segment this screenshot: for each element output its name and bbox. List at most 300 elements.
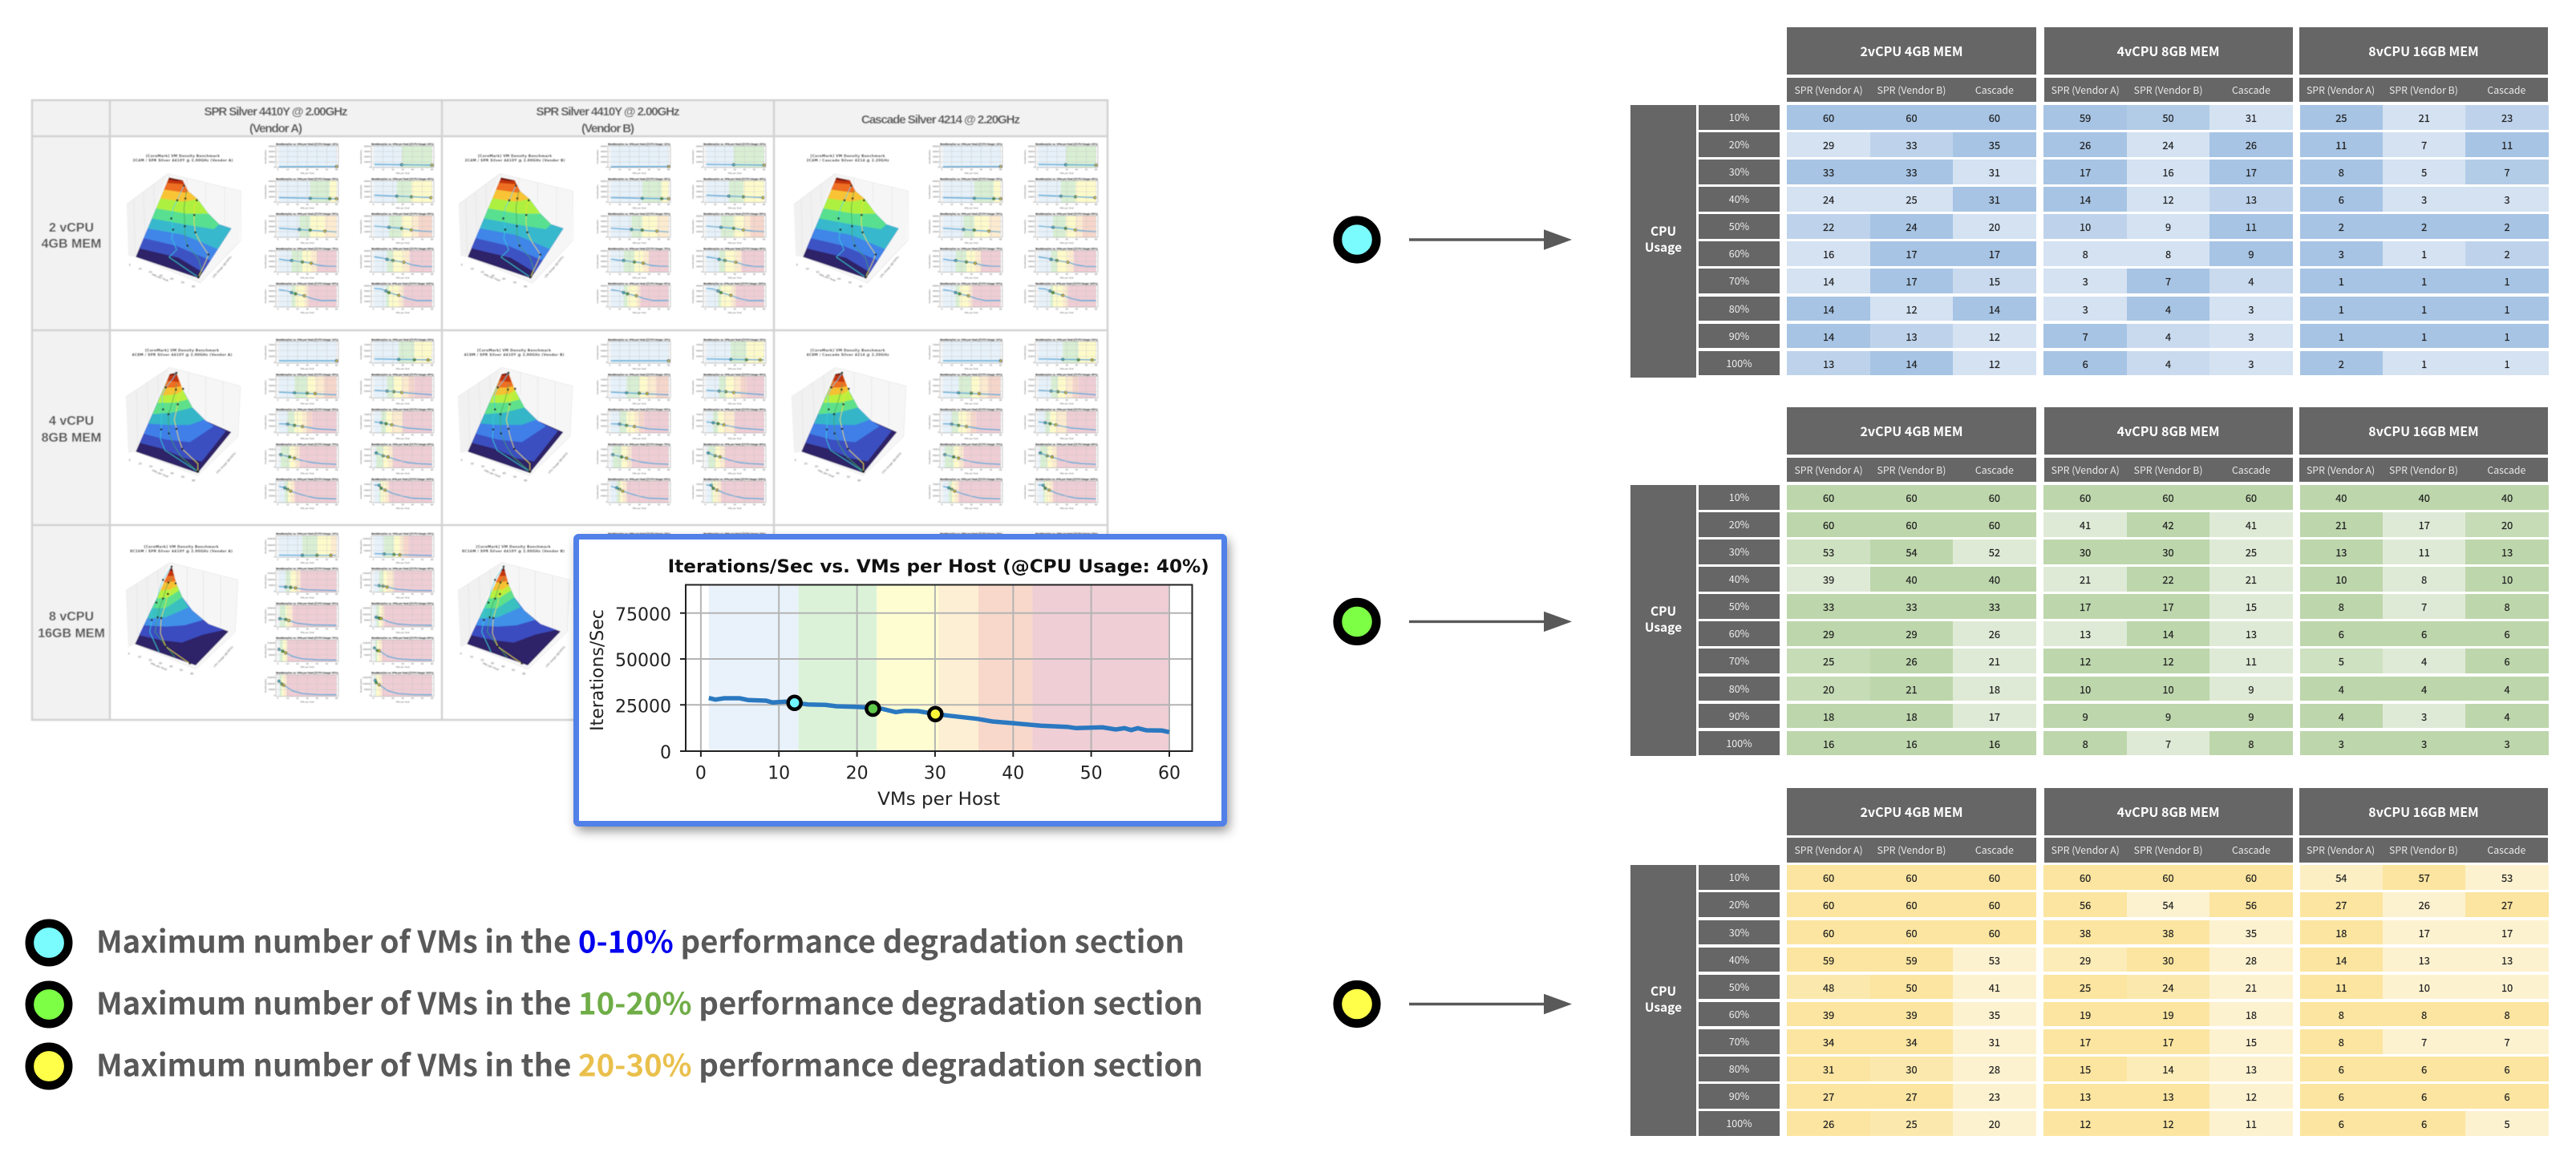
callout chart y axis label: Iterations/Sec bbox=[588, 609, 608, 731]
row: 10%: 57 bbox=[2419, 870, 2430, 885]
heading: 4vCPU 8GB MEM bbox=[2043, 788, 2293, 835]
row: 30%: 38 bbox=[2080, 925, 2091, 940]
row: 60%: 9 bbox=[2248, 246, 2254, 261]
row: 100%: 8 bbox=[2248, 736, 2254, 751]
row: 40%: 21 bbox=[2080, 572, 2091, 587]
row: 90%: 1 bbox=[2505, 329, 2510, 344]
row: 90%: 4 bbox=[2165, 329, 2171, 344]
row: 60% bbox=[1699, 1002, 2549, 1026]
cell: 2C4M Vendor B: 2C4M / SPR Silver 4410Y @ 2.00GHz (Vendor B) bbox=[465, 159, 565, 164]
row: 90%: 17 bbox=[1989, 709, 2000, 724]
row: 100%: 100% bbox=[1726, 735, 1752, 750]
row: 70%: 14 bbox=[1823, 273, 1834, 289]
row: 70%: 7 bbox=[2165, 273, 2171, 289]
row: 40%: 14 bbox=[2080, 192, 2091, 207]
subheading: 8vCPU columns: Cascade bbox=[2487, 463, 2525, 477]
row: 30% bbox=[1699, 920, 2549, 944]
row: 50%: 15 bbox=[2246, 599, 2257, 614]
legend text: 10-20%: Maximum number of VMs in the 10-20% performance degradation section bbox=[96, 980, 1203, 1023]
callout chart y tick labels: 0 bbox=[660, 743, 671, 763]
row: 40%: 10 bbox=[2335, 572, 2347, 587]
row: 70%: 21 bbox=[1989, 653, 2000, 669]
row: 80%: 18 bbox=[1989, 681, 2000, 697]
row: 90%: 1 bbox=[2339, 329, 2344, 344]
row: 80%: 3 bbox=[2083, 301, 2088, 317]
column heading: SPR Silver 4410Y Vendor B: SPR Silver 4410Y @ 2.00GHz bbox=[536, 105, 680, 119]
cell: 2C4M Vendor A bbox=[127, 143, 434, 314]
legend text: 20-30%: Maximum number of VMs in the 20-30% performance degradation section bbox=[96, 1041, 1203, 1085]
row: 10%: 50 bbox=[2162, 110, 2174, 125]
row: 20%: 11 bbox=[2335, 137, 2347, 152]
row: 80%: 4 bbox=[2165, 301, 2171, 317]
heading: 2vCPU 4GB MEM bbox=[1787, 407, 2036, 455]
row: 20%: 26 bbox=[2419, 897, 2430, 912]
row: 40%: 59 bbox=[1906, 952, 1918, 968]
row: 20%: 27 bbox=[2335, 897, 2347, 912]
side label: CPU Usage: CPU bbox=[1651, 222, 1676, 240]
cell: 2C4M Vendor B: [CoreMark] VM Density Benchmark bbox=[478, 154, 552, 159]
subheading: 8vCPU columns: SPR (Vendor B) bbox=[2389, 843, 2458, 857]
row: 100%: 12 bbox=[2162, 1116, 2174, 1131]
row: 20% bbox=[1699, 132, 2549, 157]
panel: benchmark grid of surface plots bbox=[32, 100, 1108, 720]
row: 100%: 3 bbox=[2248, 356, 2254, 371]
row: 30%: 30 bbox=[2080, 544, 2091, 560]
row: 90%: 13 bbox=[1906, 329, 1918, 344]
subheading: 8vCPU columns bbox=[2299, 458, 2548, 482]
heading: 8vCPU 16GB MEM bbox=[2299, 27, 2548, 75]
icon: yellow marker bbox=[1338, 984, 1376, 1024]
cell: 4C8M Vendor A: 4C8M / SPR Silver 4410Y @ 2.00GHz (Vendor A) bbox=[132, 353, 233, 358]
column heading: Cascade Silver 4214: Cascade Silver 4214 @ 2.20GHz bbox=[861, 113, 1020, 127]
data rows bbox=[1699, 485, 2549, 755]
row: 10%: 60 bbox=[1906, 110, 1918, 125]
row: 40%: 29 bbox=[2080, 952, 2091, 968]
row: 80%: 80% bbox=[1729, 681, 1749, 696]
row: 30%: 16 bbox=[2162, 164, 2174, 180]
row: 50%: 10 bbox=[2080, 219, 2091, 234]
heading: 8vCPU 16GB MEM bbox=[2299, 788, 2548, 835]
row: 90%: 3 bbox=[2421, 709, 2427, 724]
row: 60%: 6 bbox=[2339, 626, 2344, 641]
row: 80%: 14 bbox=[2162, 1061, 2174, 1077]
row: 60%: 35 bbox=[1989, 1007, 2000, 1022]
row: 70%: 17 bbox=[1906, 273, 1918, 289]
row: 100%: 16 bbox=[1823, 736, 1834, 751]
row: 90%: 27 bbox=[1823, 1089, 1834, 1104]
row: 80%: 1 bbox=[2505, 301, 2510, 317]
side label: CPU Usage: CPU bbox=[1651, 982, 1676, 1000]
row: 80%: 15 bbox=[2080, 1061, 2091, 1077]
row: 40% bbox=[1699, 948, 2549, 972]
row: 80%: 10 bbox=[2080, 681, 2091, 697]
row: 70%: 12 bbox=[2162, 653, 2174, 669]
row: 60%: 60% bbox=[1729, 1006, 1749, 1021]
row: 10%: 60 bbox=[2162, 490, 2174, 505]
row: 40%: 25 bbox=[1906, 192, 1918, 207]
row: 10%: 53 bbox=[2501, 870, 2513, 885]
row: 20%: 41 bbox=[2246, 517, 2257, 532]
row: 80%: 31 bbox=[1823, 1061, 1834, 1077]
row: 40%: 31 bbox=[1989, 192, 2000, 207]
row: 10%: 60 bbox=[2080, 870, 2091, 885]
row: 80%: 80% bbox=[1729, 301, 1749, 316]
row: 10%: 60 bbox=[1989, 110, 2000, 125]
row: 60%: 2 bbox=[2505, 246, 2510, 261]
row: 50%: 17 bbox=[2162, 599, 2174, 614]
cell: 4C8M Vendor A: [CoreMark] VM Density Benchmark bbox=[145, 348, 219, 353]
row: 40%: 13 bbox=[2419, 952, 2430, 968]
row: 100%: 3 bbox=[2421, 736, 2427, 751]
row: 70% bbox=[1699, 649, 2549, 673]
row: 50%: 50 bbox=[1906, 980, 1918, 995]
row: 20%: 26 bbox=[2080, 137, 2091, 152]
row: 90% bbox=[1699, 324, 2549, 348]
cell: 2C4M Vendor B bbox=[459, 143, 766, 314]
row: 70%: 6 bbox=[2505, 653, 2510, 669]
row: 100%: 20 bbox=[1989, 1116, 2000, 1131]
column heading: SPR Silver 4410Y Vendor A: SPR Silver 4410Y @ 2.00GHz bbox=[204, 105, 348, 119]
callout chart x tick labels: 30 bbox=[924, 764, 946, 784]
row: 30%: 13 bbox=[2335, 544, 2347, 560]
row: 40%: 40% bbox=[1729, 571, 1749, 586]
subheading: 2vCPU columns bbox=[1787, 838, 2036, 863]
row: 80%: 6 bbox=[2339, 1061, 2344, 1077]
row: 20%: 60 bbox=[1989, 517, 2000, 532]
row: 70% bbox=[1699, 269, 2549, 293]
row: 30%: 30% bbox=[1729, 924, 1749, 940]
row: 10%: 60 bbox=[1823, 870, 1834, 885]
subheading: 2vCPU columns: SPR (Vendor A) bbox=[1794, 463, 1863, 477]
row: 50%: 33 bbox=[1906, 599, 1918, 614]
row: 20%: 29 bbox=[1823, 137, 1834, 152]
subheading: 4vCPU columns: Cascade bbox=[2232, 83, 2270, 97]
row: 60%: 8 bbox=[2083, 246, 2088, 261]
row: 40%: 40% bbox=[1729, 952, 1749, 967]
subheading: 4vCPU columns bbox=[2043, 838, 2293, 863]
subheading: 4vCPU columns: SPR (Vendor A) bbox=[2051, 463, 2120, 477]
subheading: 8vCPU columns: SPR (Vendor A) bbox=[2307, 463, 2375, 477]
row: 100%: 16 bbox=[1906, 736, 1918, 751]
subheading: 4vCPU columns: SPR (Vendor B) bbox=[2134, 83, 2203, 97]
row: 100%: 1 bbox=[2421, 356, 2427, 371]
row: 50%: 2 bbox=[2339, 219, 2344, 234]
subheading: 4vCPU columns bbox=[2043, 78, 2293, 102]
row: 20%: 60 bbox=[1823, 517, 1834, 532]
row: 40%: 24 bbox=[1823, 192, 1834, 207]
callout chart title: Iterations/Sec vs. VMs per Host (@CPU Usage: 40%) bbox=[668, 557, 1209, 577]
row: 20%: 7 bbox=[2421, 137, 2427, 152]
row: 80%: 1 bbox=[2339, 301, 2344, 317]
row: 90% bbox=[1699, 1084, 2549, 1109]
table background and grid lines bbox=[32, 100, 1108, 720]
row heading: 2 vCPU 4GB MEM: 4GB MEM bbox=[42, 237, 101, 251]
row: 10%: 59 bbox=[2080, 110, 2091, 125]
row: 40%: 40 bbox=[1906, 572, 1918, 587]
row: 30%: 52 bbox=[1989, 544, 2000, 560]
callout chart y tick labels: 50000 bbox=[615, 651, 671, 671]
callout chart x tick labels: 10 bbox=[768, 764, 790, 784]
side label: CPU Usage bbox=[1630, 105, 1696, 378]
row: 100%: 100% bbox=[1726, 355, 1752, 370]
row: 40%: 6 bbox=[2339, 192, 2344, 207]
subheading: 8vCPU columns bbox=[2299, 78, 2548, 102]
data rows bbox=[1699, 865, 2549, 1136]
row: 20%: 17 bbox=[2419, 517, 2430, 532]
row: 100%: 6 bbox=[2083, 356, 2088, 371]
row: 60%: 29 bbox=[1823, 626, 1834, 641]
row: 20%: 33 bbox=[1906, 137, 1918, 152]
row: 60%: 26 bbox=[1989, 626, 2000, 641]
row: 70%: 1 bbox=[2421, 273, 2427, 289]
row: 20% bbox=[1699, 512, 2549, 537]
row: 100% bbox=[1699, 1111, 2549, 1136]
side label: CPU Usage bbox=[1630, 865, 1696, 1136]
heading: 4vCPU 8GB MEM: 4vCPU 8GB MEM bbox=[2117, 421, 2220, 440]
row: 90% bbox=[1699, 704, 2549, 728]
row: 60%: 8 bbox=[2165, 246, 2171, 261]
subheading: 8vCPU columns bbox=[2299, 838, 2548, 863]
row: 40%: 59 bbox=[1823, 952, 1834, 968]
row: 50%: 10 bbox=[2419, 980, 2430, 995]
row: 50% bbox=[1699, 214, 2549, 239]
row: 60%: 1 bbox=[2421, 246, 2427, 261]
column heading: SPR Silver 4410Y Vendor B: (Vendor B) bbox=[581, 122, 634, 135]
row: 100%: 11 bbox=[2246, 1116, 2257, 1131]
marker: 20-30% point bbox=[929, 708, 942, 721]
cell: 2C4M Cascade bbox=[794, 143, 1098, 314]
row: 50%: 2 bbox=[2505, 219, 2510, 234]
row: 90%: 13 bbox=[2080, 1089, 2091, 1104]
row: 50% bbox=[1699, 594, 2549, 619]
callout chart y tick labels: 25000 bbox=[615, 697, 671, 717]
heading: 8vCPU 16GB MEM: 8vCPU 16GB MEM bbox=[2368, 802, 2479, 821]
callout chart bands bbox=[686, 585, 1192, 751]
subheading: 2vCPU columns: SPR (Vendor B) bbox=[1877, 83, 1946, 97]
row: 100% bbox=[1699, 351, 2549, 375]
row: 50% bbox=[1699, 975, 2549, 999]
row: 80% bbox=[1699, 677, 2549, 701]
row: 70%: 4 bbox=[2421, 653, 2427, 669]
row heading: 8 vCPU 16GB MEM: 8 vCPU bbox=[49, 610, 94, 624]
row: 80%: 4 bbox=[2421, 681, 2427, 697]
row: 60%: 13 bbox=[2080, 626, 2091, 641]
row: 10%: 10% bbox=[1729, 109, 1749, 124]
callout chart y tick labels: 75000 bbox=[615, 605, 671, 625]
subheading: 2vCPU columns: SPR (Vendor A) bbox=[1794, 83, 1863, 97]
legend marker: green bbox=[30, 985, 68, 1024]
callout chart x tick labels: 0 bbox=[695, 764, 707, 784]
heading: 8vCPU 16GB MEM: 8vCPU 16GB MEM bbox=[2368, 41, 2479, 60]
arrow to blue table bbox=[1409, 229, 1572, 250]
subheading: 2vCPU columns bbox=[1787, 458, 2036, 482]
row: 20%: 20% bbox=[1729, 136, 1749, 152]
row: 20%: 21 bbox=[2335, 517, 2347, 532]
subheading: 8vCPU columns: Cascade bbox=[2487, 83, 2525, 97]
arrow to yellow table bbox=[1409, 994, 1572, 1014]
subheading: 2vCPU columns: SPR (Vendor B) bbox=[1877, 843, 1946, 857]
row: 70%: 15 bbox=[1989, 273, 2000, 289]
row: 30%: 60 bbox=[1823, 925, 1834, 940]
row: 20%: 11 bbox=[2501, 137, 2513, 152]
row: 50%: 7 bbox=[2421, 599, 2427, 614]
row: 60%: 17 bbox=[1906, 246, 1918, 261]
row: 10%: 60 bbox=[2162, 870, 2174, 885]
row: 20%: 56 bbox=[2080, 897, 2091, 912]
row: 80%: 80% bbox=[1729, 1061, 1749, 1076]
row: 10% bbox=[1699, 485, 2549, 510]
row: 20%: 24 bbox=[2162, 137, 2174, 152]
cell: 8C16M Vendor A bbox=[126, 532, 434, 704]
row: 30%: 54 bbox=[1906, 544, 1918, 560]
row: 30%: 33 bbox=[1823, 164, 1834, 180]
cell: 4C8M Cascade: 4C8M / Cascade Silver 4214 @ 2.20GHz bbox=[807, 353, 889, 358]
row: 80%: 20 bbox=[1823, 681, 1834, 697]
subheading: 2vCPU columns: Cascade bbox=[1975, 843, 2014, 857]
row: 10%: 40 bbox=[2419, 490, 2430, 505]
row: 70%: 4 bbox=[2248, 273, 2254, 289]
row: 60%: 8 bbox=[2339, 1007, 2344, 1022]
row: 50%: 10 bbox=[2501, 980, 2513, 995]
subheading: 4vCPU columns: SPR (Vendor B) bbox=[2134, 463, 2203, 477]
row: 100%: 4 bbox=[2165, 356, 2171, 371]
row: 60% bbox=[1699, 241, 2549, 266]
row: 80%: 9 bbox=[2248, 681, 2254, 697]
subheading: 4vCPU columns: SPR (Vendor A) bbox=[2051, 83, 2120, 97]
row: 70%: 70% bbox=[1729, 653, 1749, 668]
cell: 8C16M Vendor A: [CoreMark] VM Density Benchmark bbox=[144, 545, 219, 550]
row: 60%: 18 bbox=[2246, 1007, 2257, 1022]
row: 10%: 60 bbox=[2246, 870, 2257, 885]
row heading: 4 vCPU 8GB MEM: 8GB MEM bbox=[42, 431, 101, 445]
icon: green marker bbox=[1338, 602, 1376, 641]
row: 40%: 13 bbox=[2246, 192, 2257, 207]
row: 10%: 10% bbox=[1729, 869, 1749, 884]
row: 40%: 21 bbox=[2246, 572, 2257, 587]
row: 100%: 6 bbox=[2339, 1116, 2344, 1131]
row: 50%: 25 bbox=[2080, 980, 2091, 995]
row: 30%: 17 bbox=[2501, 925, 2513, 940]
row: 50%: 21 bbox=[2246, 980, 2257, 995]
row: 20%: 60 bbox=[1906, 517, 1918, 532]
row: 80%: 14 bbox=[1823, 301, 1834, 317]
row: 90%: 18 bbox=[1823, 709, 1834, 724]
column heading: SPR Silver 4410Y Vendor A: (Vendor A) bbox=[249, 122, 302, 135]
row: 80% bbox=[1699, 297, 2549, 321]
row: 100%: 8 bbox=[2083, 736, 2088, 751]
heading: 2vCPU 4GB MEM bbox=[1787, 788, 2036, 835]
row: 50%: 20 bbox=[1989, 219, 2000, 234]
row: 100%: 26 bbox=[1823, 1116, 1834, 1131]
row: 50%: 2 bbox=[2421, 219, 2427, 234]
cell: 4C8M Cascade bbox=[792, 338, 1098, 510]
row: 100%: 3 bbox=[2339, 736, 2344, 751]
row: 60%: 13 bbox=[2246, 626, 2257, 641]
row: 50%: 33 bbox=[1989, 599, 2000, 614]
legend: degradation section markers bbox=[30, 917, 1203, 1085]
row: 100%: 100% bbox=[1726, 1115, 1752, 1130]
row: 40%: 22 bbox=[2162, 572, 2174, 587]
row: 80%: 30 bbox=[1906, 1061, 1918, 1077]
row: 90%: 3 bbox=[2248, 329, 2254, 344]
row: 100%: 16 bbox=[1989, 736, 2000, 751]
row: 30%: 35 bbox=[2246, 925, 2257, 940]
row: 60% bbox=[1699, 621, 2549, 646]
row heading: 4 vCPU 8GB MEM: 4 vCPU bbox=[49, 414, 94, 428]
heading: 2vCPU 4GB MEM: 2vCPU 4GB MEM bbox=[1860, 41, 1962, 60]
row: 40%: 8 bbox=[2421, 572, 2427, 587]
subheading: 2vCPU columns: SPR (Vendor B) bbox=[1877, 463, 1946, 477]
row: 30%: 31 bbox=[1989, 164, 2000, 180]
row: 20%: 20% bbox=[1729, 516, 1749, 531]
legend marker: cyan bbox=[30, 924, 68, 962]
row: 30%: 30% bbox=[1729, 164, 1749, 179]
row: 80%: 1 bbox=[2421, 301, 2427, 317]
row: 70%: 5 bbox=[2339, 653, 2344, 669]
arrow to green table bbox=[1409, 612, 1572, 632]
row: 60%: 3 bbox=[2339, 246, 2344, 261]
row: 80%: 13 bbox=[2246, 1061, 2257, 1077]
row: 90%: 12 bbox=[2246, 1089, 2257, 1104]
row: 20%: 35 bbox=[1989, 137, 2000, 152]
row: 20%: 54 bbox=[2162, 897, 2174, 912]
row: 10%: 23 bbox=[2501, 110, 2513, 125]
row: 80%: 4 bbox=[2505, 681, 2510, 697]
row: 10%: 31 bbox=[2246, 110, 2257, 125]
callout chart x tick labels: 20 bbox=[846, 764, 869, 784]
row: 10%: 54 bbox=[2335, 870, 2347, 885]
row: 70%: 34 bbox=[1906, 1034, 1918, 1049]
row: 80%: 10 bbox=[2162, 681, 2174, 697]
row: 60%: 6 bbox=[2421, 626, 2427, 641]
row: 30% bbox=[1699, 540, 2549, 564]
row: 40% bbox=[1699, 567, 2549, 592]
row: 90%: 90% bbox=[1729, 708, 1749, 723]
row: 30%: 60 bbox=[1989, 925, 2000, 940]
row: 10%: 60 bbox=[1906, 490, 1918, 505]
row: 20%: 26 bbox=[2246, 137, 2257, 152]
row: 30%: 17 bbox=[2419, 925, 2430, 940]
row: 40%: 40 bbox=[1989, 572, 2000, 587]
cell: 8C16M Vendor B: [CoreMark] VM Density Benchmark bbox=[476, 545, 551, 550]
row: 90%: 9 bbox=[2248, 709, 2254, 724]
callout chart x axis label: VMs per Host bbox=[877, 790, 1000, 810]
row: 70%: 70% bbox=[1729, 273, 1749, 288]
subheading: 4vCPU columns bbox=[2043, 458, 2293, 482]
row: 20%: 20% bbox=[1729, 896, 1749, 911]
row: 100%: 7 bbox=[2165, 736, 2171, 751]
row: 80%: 28 bbox=[1989, 1061, 2000, 1077]
row: 50%: 33 bbox=[1823, 599, 1834, 614]
heading: 8vCPU 16GB MEM: 8vCPU 16GB MEM bbox=[2368, 421, 2479, 440]
row: 80% bbox=[1699, 1057, 2549, 1081]
icon: cyan marker bbox=[1338, 220, 1376, 259]
subheading: 4vCPU columns: SPR (Vendor A) bbox=[2051, 843, 2120, 857]
row: 90%: 90% bbox=[1729, 328, 1749, 343]
row: 60%: 39 bbox=[1906, 1007, 1918, 1022]
row: 40%: 40% bbox=[1729, 191, 1749, 206]
row: 100%: 13 bbox=[1823, 356, 1834, 371]
cell: 4C8M Vendor B bbox=[458, 338, 766, 510]
legend marker: yellow bbox=[30, 1047, 68, 1085]
row: 30% bbox=[1699, 160, 2549, 184]
row: 40%: 13 bbox=[2501, 952, 2513, 968]
row: 50%: 11 bbox=[2335, 980, 2347, 995]
row: 50%: 41 bbox=[1989, 980, 2000, 995]
row: 80%: 14 bbox=[1989, 301, 2000, 317]
subheading: 8vCPU columns: SPR (Vendor A) bbox=[2307, 843, 2375, 857]
row: 60%: 6 bbox=[2505, 626, 2510, 641]
